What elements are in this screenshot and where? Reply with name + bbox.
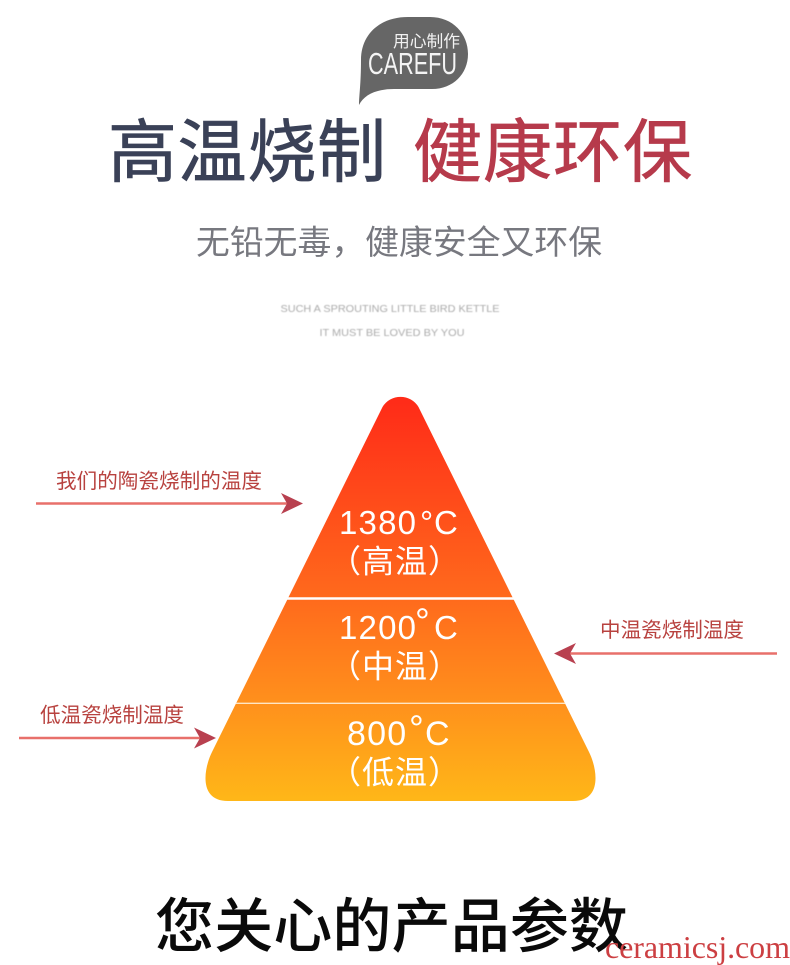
tier label: 1380°C high	[329, 504, 460, 580]
subtitle: 无铅无毒，健康安全又环保	[196, 224, 602, 262]
tier label: 800°C low: ）	[428, 754, 460, 790]
title: 高温烧制	[108, 114, 386, 191]
callout: our ceramic firing temperature	[36, 470, 303, 514]
tier label: 1380°C high: °	[420, 504, 433, 541]
tier label: 1380°C high: 1380	[339, 504, 417, 541]
tier label: 1200°C medium: °	[415, 601, 430, 642]
tier label: 800°C low: °	[409, 708, 424, 749]
tier label: 800°C low: 800	[347, 715, 407, 753]
title	[108, 114, 692, 191]
tier label: 800°C low: （	[329, 754, 361, 790]
tier label: 1200°C medium: 中	[362, 648, 394, 684]
tier label: 1380°C high: ）	[428, 544, 460, 580]
logo badge: CAREFU speech bubble	[359, 17, 468, 105]
watermark: ceramicsj.com	[605, 929, 790, 965]
temperature pyramid	[205, 397, 596, 801]
English tagline: IT MUST BE LOVED BY YOU	[320, 327, 464, 339]
tier label: 1380°C high: 温	[395, 544, 427, 580]
tier label: 1200°C medium: （	[329, 648, 361, 684]
tier label: 1200°C medium: C	[434, 609, 458, 646]
tier label: 1200°C medium: 1200	[339, 609, 417, 646]
tier label: 1200°C medium: 温	[395, 648, 427, 684]
pyramid body	[205, 397, 596, 801]
tier label: 800°C low: C	[425, 715, 450, 753]
title: 健康环保	[413, 114, 692, 191]
tier label: 1200°C medium: ）	[428, 648, 460, 684]
callout: medium temperature firing	[554, 619, 777, 664]
tier label: 1380°C high: 高	[362, 544, 394, 580]
tier label: 1380°C high: C	[434, 504, 458, 541]
tier label: 800°C low: 低	[362, 754, 394, 790]
callout: low temperature firing: 低温瓷烧制温度	[40, 704, 184, 727]
callout: low temperature firing	[19, 704, 216, 748]
callout: medium temperature firing: 中温瓷烧制温度	[600, 619, 744, 642]
tier label: 800°C low: 温	[395, 754, 427, 790]
tier dividers	[236, 598, 565, 703]
section heading: 您关心的产品参数	[155, 894, 628, 960]
tier label: 1380°C high: （	[329, 544, 361, 580]
tier label: 1200°C medium	[329, 601, 460, 684]
tier label: 800°C low	[329, 708, 460, 790]
callout: our ceramic firing temperature: 我们的陶瓷烧制的温度	[56, 470, 262, 493]
logo badge: CAREFU speech bubble: CAREFU	[368, 46, 457, 81]
English tagline: SUCH A SPROUTING LITTLE BIRD KETTLE	[280, 303, 500, 315]
English tagline	[280, 303, 500, 339]
logo badge: CAREFU speech bubble: 用心制作	[393, 32, 460, 51]
